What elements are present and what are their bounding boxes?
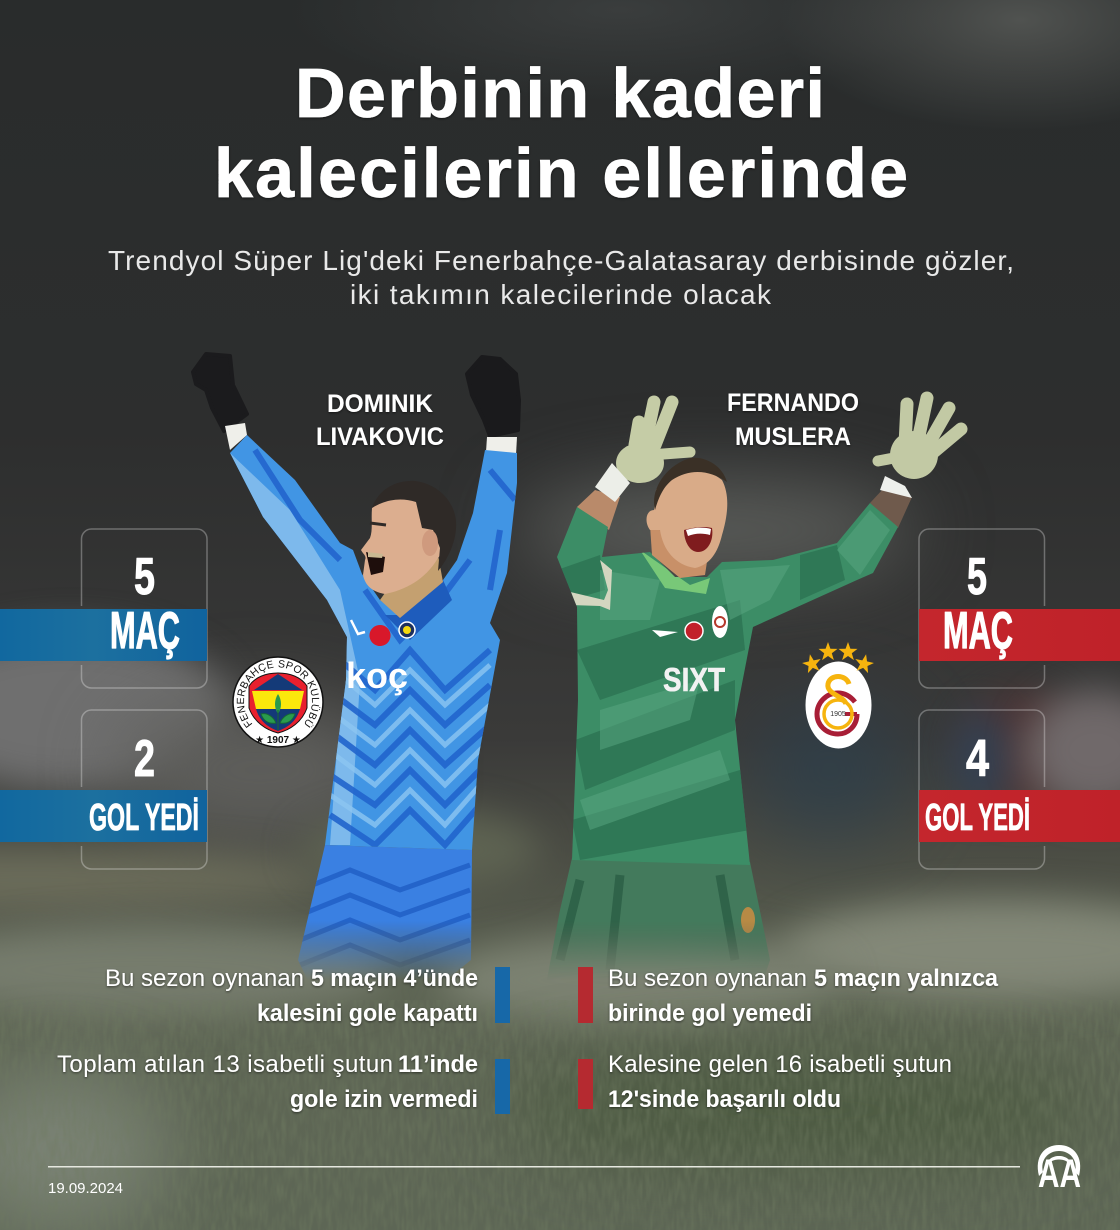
text block: Livakovic facts: 11’inde bbox=[398, 1051, 478, 1078]
player name: Fernando Muslera: FERNANDO bbox=[727, 389, 859, 417]
date: 19.09.2024 bbox=[48, 1180, 123, 1197]
neck and face bbox=[650, 530, 707, 578]
text block: Livakovic facts: Bu sezon oynanan bbox=[105, 965, 304, 992]
left glove bbox=[635, 402, 690, 455]
arms skin bbox=[577, 490, 620, 530]
title: Derbinin kaderi bbox=[295, 54, 825, 132]
logo: Fenerbahçe crest: ★ 1907 ★ bbox=[255, 735, 301, 746]
stat panel: Galatasaray matches: 5 bbox=[967, 548, 987, 606]
text block: Livakovic facts: gole izin vermedi bbox=[290, 1086, 478, 1113]
logo: AA agency: AA bbox=[1038, 1152, 1081, 1196]
text block: Livakovic facts: Toplam atılan 13 isabetli şutun bbox=[57, 1051, 393, 1078]
subtitle: Trendyol Süper Lig'deki Fenerbahçe-Galatasaray derbisinde gözler, bbox=[108, 245, 1014, 276]
stat panel: Galatasaray goals conceded: 4 bbox=[966, 730, 989, 788]
left glove bbox=[193, 354, 247, 431]
stat panel: Galatasaray matches bbox=[919, 529, 1120, 688]
title bbox=[214, 54, 908, 212]
jersey sponsor: koç bbox=[346, 655, 408, 696]
text block: Livakovic facts bbox=[57, 965, 478, 1113]
text block: Muslera facts: 5 maçın yalnızca bbox=[814, 965, 999, 992]
player name: Dominik Livakovic bbox=[316, 390, 444, 451]
stat panel: Fenerbahçe goals conceded: 2 bbox=[134, 730, 155, 788]
right glove bbox=[467, 357, 519, 436]
jersey sponsor: SIXT bbox=[663, 661, 725, 698]
text block: Muslera facts bbox=[608, 965, 999, 1113]
stat panel: Fenerbahçe matches: MAÇ bbox=[110, 602, 180, 660]
player name: Fernando Muslera bbox=[727, 389, 859, 451]
stat panel: Fenerbahçe goals conceded: GOL YEDİ bbox=[89, 797, 199, 839]
stat panel: Galatasaray goals conceded: GOL YEDİ bbox=[925, 797, 1030, 839]
jersey crests bbox=[652, 630, 678, 637]
title: kalecilerin ellerinde bbox=[214, 134, 908, 212]
text block: Muslera facts: Kalesine gelen 16 isabetli şutun bbox=[608, 1051, 952, 1078]
stat panel: Fenerbahçe matches bbox=[0, 529, 207, 688]
jersey crests bbox=[369, 625, 391, 646]
shorts bbox=[298, 845, 472, 985]
footer rule bbox=[48, 1166, 1020, 1168]
subtitle: iki takımın kalecilerinde olacak bbox=[350, 279, 772, 310]
logo: Galatasaray crest bbox=[801, 642, 875, 748]
shorts bbox=[548, 858, 770, 972]
player name: Dominik Livakovic: LIVAKOVIC bbox=[316, 423, 444, 451]
bullet bars: blue bbox=[495, 967, 510, 1114]
stat panel: Fenerbahçe goals conceded bbox=[0, 710, 207, 869]
jersey bbox=[557, 503, 898, 865]
logo: AA agency bbox=[1038, 1145, 1081, 1196]
text block: Muslera facts: Bu sezon oynanan bbox=[608, 965, 807, 992]
logo: Fenerbahçe crest: FENERBAHÇE SPOR KULÜBÜ bbox=[236, 660, 320, 728]
subtitle bbox=[108, 245, 1014, 310]
neck and face bbox=[380, 555, 443, 618]
text block: Livakovic facts: kalesini gole kapattı bbox=[257, 1000, 478, 1027]
text block: Muslera facts: 12'sinde başarılı oldu bbox=[608, 1086, 841, 1113]
right glove bbox=[878, 398, 961, 461]
stat panel: Fenerbahçe matches: 5 bbox=[134, 548, 155, 606]
text block: Livakovic facts: 5 maçın 4’ünde bbox=[311, 965, 478, 992]
bullet bars: red bbox=[578, 967, 593, 1109]
player: Dominik Livakovic bbox=[193, 354, 519, 985]
jersey bbox=[230, 435, 517, 850]
text block: Muslera facts: birinde gol yemedi bbox=[608, 1000, 812, 1027]
logo: Galatasaray crest: 1905 bbox=[830, 711, 846, 718]
stat panel: Galatasaray matches: MAÇ bbox=[943, 602, 1013, 660]
stat panel: Galatasaray goals conceded bbox=[919, 710, 1120, 869]
player name: Fernando Muslera: MUSLERA bbox=[735, 423, 851, 451]
player: Fernando Muslera bbox=[545, 398, 961, 990]
player name: Dominik Livakovic: DOMINIK bbox=[327, 390, 433, 418]
